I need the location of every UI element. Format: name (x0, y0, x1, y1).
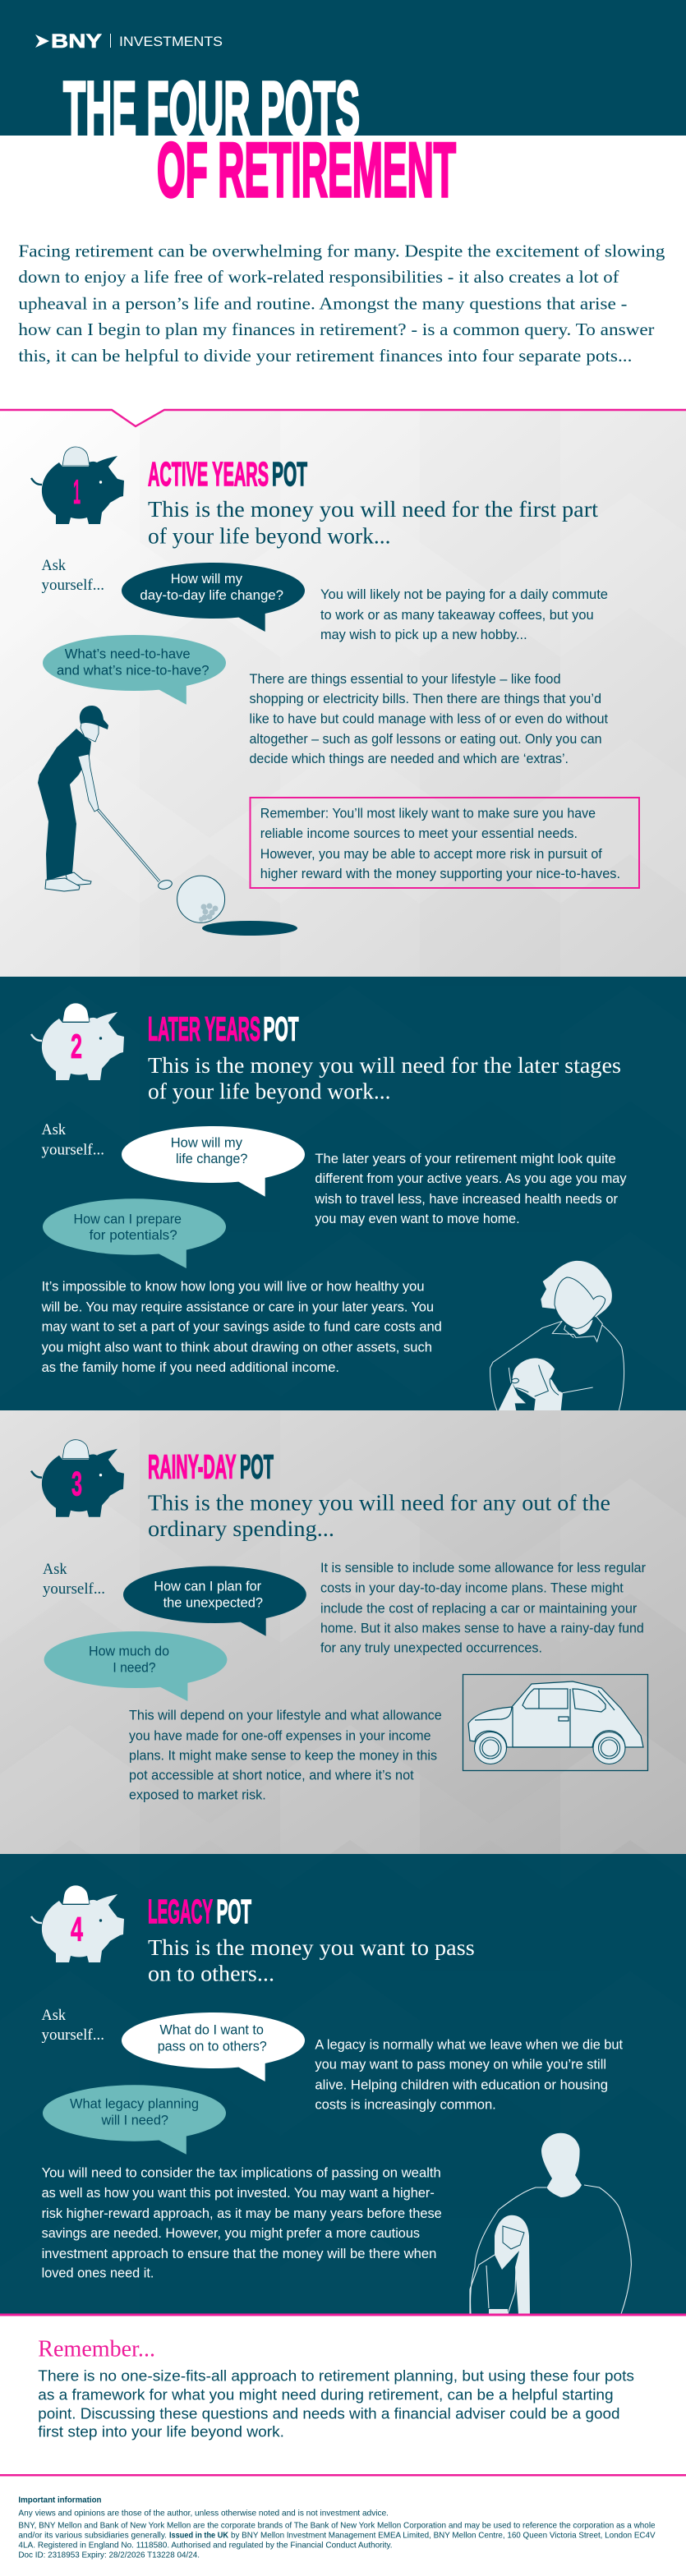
heading: later years pot: LATER YEARS (148, 1010, 260, 1048)
body text: later years (314, 1151, 627, 1226)
speech bubble: legacy planning: What legacy planning (70, 2096, 199, 2112)
subheading: This is the money you will need for the first part (148, 497, 599, 522)
pink divider: footer top (0, 2474, 686, 2476)
subheading: of your life beyond work... (148, 1079, 391, 1104)
body text: essentials: altogether – such as golf lessons or eating out. Only you can (250, 731, 601, 747)
intro text: upheaval in a person’s life and routine. Amongst the many questions that arise - (18, 294, 627, 314)
body text: tax: You will need to consider the tax implications of passing on wealth (42, 2165, 441, 2181)
panel: rainy-day pot: POT (240, 1447, 274, 1485)
body text: commute (320, 586, 608, 642)
body text: tax: risk higher-reward approach, as it may be many years before these (42, 2206, 442, 2221)
body text: healthy: may want to set a part of your savings aside to fund care costs and (42, 1319, 442, 1335)
body text: sensible: home. But it also makes sense to have a rainy-day fund (320, 1620, 644, 1635)
panel: rainy-day pot (0, 1410, 686, 1854)
ask yourself label: Ask (41, 1121, 66, 1138)
golfer head (80, 706, 108, 742)
logo: BNY Investments (35, 30, 223, 53)
golfer body (38, 729, 91, 881)
speech bubble: life change: How will my (171, 1135, 242, 1151)
speech bubble: day-to-day (122, 563, 305, 632)
body text: healthy: as the family home if you need additional income. (42, 1359, 339, 1375)
body text: healthy: you might also want to think about drawing on other assets, such (42, 1340, 432, 1355)
body text: sensible: It is sensible to include some allowance for less regular (320, 1560, 646, 1576)
car body (468, 1681, 643, 1747)
icon: piggy bank 4 (31, 1885, 124, 1962)
girl hair (495, 2215, 530, 2314)
speech bubble: how much: I need? (113, 1660, 156, 1676)
body text: legacy: A legacy is normally what we leave when we die but (315, 2036, 623, 2052)
body text: sensible (320, 1560, 646, 1656)
golf ball (177, 876, 225, 922)
subheading: This is the money you will need for the later stages (148, 1053, 621, 1078)
remember body: first step into your life beyond work. (38, 2424, 284, 2440)
subheading: ordinary spending... (148, 1516, 334, 1541)
golfer arm (78, 754, 99, 812)
speech bubble: legacy planning: will I need? (101, 2113, 168, 2128)
speech bubble: life change: life change? (176, 1151, 247, 1166)
body text: essentials: like to have but could manage with less of or even do without (250, 711, 608, 727)
heading: active years pot (148, 455, 307, 493)
heading: later years pot (148, 1010, 299, 1048)
intro text: Facing retirement can be overwhelming for many. Despite the excitement of slowing (18, 242, 665, 261)
golf hole (202, 921, 297, 936)
heading: active years pot: ACTIVE YEARS (148, 455, 269, 493)
body text: essentials: There are things essential to your lifestyle – like food (250, 671, 560, 687)
footer: important information: Issued in the UK (169, 2530, 228, 2540)
footer: important information: by BNY Mellon Investment Management EMEA Limited, BNY Mellon Centre, 160 Queen Victoria Street, London EC4V (231, 2530, 656, 2540)
body text: healthy: It’s impossible to know how long you will live or how healthy you (42, 1279, 424, 1295)
ask yourself label (41, 2007, 104, 2044)
body text: legacy: alive. Helping children with education or housing (315, 2077, 608, 2092)
white notch and pink divider with chevron (0, 410, 686, 426)
panel: remember (38, 2335, 634, 2440)
body text: legacy (315, 2036, 623, 2112)
body text: lifestyle: This will depend on your lifestyle and what allowance (129, 1707, 442, 1723)
ask yourself label: yourself... (41, 1142, 104, 1159)
body text: later years: different from your active years. As you age you may (315, 1171, 627, 1186)
footer: important information: Any views and opinions are those of the author, unless otherwise noted and is not investment advice. (18, 2509, 389, 2518)
icon: piggy bank 3: 3 (71, 1465, 82, 1503)
body text: later years: you may even want to move home. (315, 1211, 520, 1226)
icon: piggy bank 2 (31, 1003, 124, 1080)
body text: tax (42, 2165, 442, 2281)
heading: legacy pot: POT (217, 1893, 251, 1930)
speech bubble: how much (44, 1631, 227, 1701)
panel: active years pot (0, 410, 686, 977)
body text: healthy (41, 1279, 442, 1375)
header band: THE FOUR POTS (63, 66, 360, 151)
body text: tax: loved ones need it. (42, 2266, 154, 2281)
golfer shoes (45, 872, 91, 891)
speech bubble: need-to-have: What’s need-to-have (65, 646, 191, 662)
ask yourself label (41, 557, 104, 594)
callout: remember: Remember: You’ll most likely want to make sure you have (260, 806, 596, 821)
ask yourself label: yourself... (43, 1580, 105, 1598)
body text: sensible: costs in your day-to-day income plans. These might (320, 1580, 624, 1595)
body text: later years: wish to travel less, have increased health needs or (314, 1191, 618, 1207)
subheading (148, 497, 599, 549)
body text: commute: may wish to pick up a new hobby... (320, 627, 527, 642)
speech bubble: life change (122, 1126, 305, 1197)
subheading: on to others... (148, 1962, 274, 1986)
body text: healthy: will be. You may require assistance or care in your later years. You (41, 1300, 434, 1315)
golf club (96, 807, 173, 890)
illustration: golfer (38, 706, 297, 936)
icon: piggy bank 2: 2 (71, 1027, 82, 1065)
heading: rainy-day pot: RAINY-DAY (148, 1447, 237, 1485)
footer: important information: 4LA. Registered in England No. 1118580. Authorised and regulated by the Financial Conduct Authority. (18, 2541, 393, 2551)
intro text: this, it can be helpful to divide your retirement finances into four separate pots... (18, 346, 632, 366)
subheading (148, 1053, 621, 1104)
body text: essentials (250, 671, 608, 766)
subheading: This is the money you will need for any out of the (148, 1490, 610, 1515)
speech bubble: unexpected: How can I plan for (154, 1579, 261, 1594)
subheading: of your life beyond work... (148, 524, 391, 549)
illustration: woman with dog (490, 1261, 624, 1410)
logo: BNY Investments: INVESTMENTS (119, 34, 223, 49)
man outline (471, 2185, 631, 2314)
remember body (38, 2367, 634, 2440)
ask yourself label: Ask (41, 557, 66, 574)
callout: remember (250, 798, 639, 888)
heading: later years pot: POT (263, 1010, 299, 1048)
speech bubble: pass on: pass on to others? (158, 2039, 267, 2054)
body text: lifestyle: pot accessible at short notice, and where it’s not (129, 1768, 414, 1783)
speech bubble: potentials (43, 1198, 226, 1268)
subheading (148, 1490, 610, 1541)
ask yourself label: yourself... (41, 2026, 104, 2044)
footer: important information: Important information (18, 2496, 101, 2505)
car windows and door (475, 1689, 615, 1747)
girl face (503, 2226, 524, 2249)
remember body: There is no one-size-fits-all approach to retirement planning, but using these four pots (38, 2367, 634, 2384)
body text: essentials: decide which things are needed and which are ‘extras’. (250, 751, 569, 766)
woman neck (573, 1320, 593, 1335)
icon: piggy bank 3 (31, 1440, 124, 1517)
car wheels (475, 1732, 625, 1764)
subheading (148, 1935, 475, 1986)
footer: important information (18, 2496, 656, 2560)
callout: remember: However, you may be able to accept more risk in pursuit of (260, 846, 602, 862)
girl book (489, 2309, 508, 2314)
speech bubble: day-to-day: day-to-day life change? (140, 587, 283, 603)
footer: important information: and/or its various subsidiaries generally. (18, 2530, 167, 2540)
body text: tax: as well as how you want this pot invested. You may want a higher- (42, 2185, 435, 2201)
heading: rainy-day pot (148, 1447, 274, 1485)
man head and neck (541, 2133, 582, 2197)
heading: active years pot: POT (272, 455, 307, 493)
intro text: how can I begin to plan my finances in retirement? - is a common query. To answer (18, 320, 654, 339)
girl outline (470, 2255, 516, 2314)
speech bubble: pass on: What do I want to (159, 2022, 264, 2038)
speech bubble: unexpected: the unexpected? (163, 1595, 263, 1611)
icon: piggy bank 1 (31, 447, 124, 524)
pink divider: remember top (0, 2313, 686, 2316)
woman outline (490, 1316, 624, 1410)
header band (0, 0, 686, 151)
subheading: This is the money you want to pass (148, 1935, 475, 1960)
speech bubble: need-to-have: and what’s nice-to-have? (57, 663, 209, 678)
dog details (511, 1365, 559, 1396)
heading: legacy pot: LEGACY (148, 1893, 213, 1930)
speech bubble: day-to-day: How will my (171, 571, 242, 586)
illustration: father and daughter (470, 2133, 631, 2314)
body text: lifestyle: exposed to market risk. (129, 1787, 266, 1803)
ask yourself label (43, 1561, 105, 1598)
speech bubble: potentials: How can I prepare (74, 1211, 182, 1226)
speech bubble: pass on (122, 2012, 305, 2082)
illustration: car in frame (463, 1674, 647, 1771)
body text: essentials: shopping or electricity bills. Then there are things that you’d (250, 691, 601, 706)
body text: tax: investment approach to ensure that the money will be there when (42, 2246, 436, 2261)
footer: important information: Doc ID: 2318953 Expiry: 28/2/2026 T13228 04/24. (18, 2550, 200, 2560)
speech bubble: unexpected (123, 1566, 306, 1636)
body text: legacy: costs is increasingly common. (315, 2096, 496, 2112)
speech bubble: potentials: for potentials? (90, 1227, 177, 1243)
body text: sensible: include the cost of replacing a car or maintaining your (320, 1600, 638, 1616)
body text: legacy: you may want to pass money on while you’re still (315, 2056, 606, 2072)
callout: remember: higher reward with the money supporting your nice-to-haves. (260, 866, 620, 881)
icon: piggy bank 4: 4 (71, 1910, 83, 1948)
dog (499, 1358, 563, 1410)
panel: later years pot (0, 977, 686, 1410)
remember body: point. Discussing these questions and needs with a financial adviser could be a good (38, 2405, 620, 2422)
woman face (555, 1277, 605, 1328)
body text: sensible: for any truly unexpected occurrences. (320, 1640, 542, 1656)
body text: commute: to work or as many takeaway coffees, but you (320, 607, 594, 623)
speech bubble: need-to-have (43, 635, 226, 705)
intro text (18, 242, 665, 366)
remember heading: Remember... (38, 2335, 155, 2362)
body text: commute: You will likely not be paying for a daily commute (320, 586, 608, 602)
footer: important information: BNY, BNY Mellon and Bank of New York Mellon are the corporate brands of The Bank of New York Mellon Corporation and may be used to reference the corporation as a whole (18, 2520, 656, 2530)
intro text: down to enjoy a life free of work-related responsibilities - it also creates a lot of (18, 267, 619, 287)
icon: piggy bank 1: 1 (73, 472, 81, 511)
ask yourself label (41, 1121, 104, 1159)
woman hair (541, 1261, 612, 1317)
ask yourself label: yourself... (41, 577, 104, 594)
body text: tax: savings are needed. However, you might prefer a more cautious (42, 2225, 420, 2241)
panel: legacy pot (0, 1854, 686, 2314)
body text: lifestyle: you have made for one-off expenses in your income (129, 1727, 430, 1743)
body text: later years: The later years of your retirement might look quite (315, 1151, 616, 1166)
ask yourself label: Ask (43, 1561, 67, 1578)
remember body: as a framework for what you might need during retirement, can be a helpful starting (38, 2387, 614, 2404)
callout: remember: reliable income sources to meet your essential needs. (260, 826, 578, 841)
speech bubble: how much: How much do (89, 1644, 169, 1659)
speech bubble: legacy planning (43, 2085, 226, 2155)
logo: BNY Investments: BNY (51, 30, 102, 53)
body text: lifestyle (129, 1707, 442, 1803)
body text: lifestyle: plans. It might make sense to keep the money in this (129, 1747, 437, 1763)
ask yourself label: Ask (41, 2007, 66, 2024)
